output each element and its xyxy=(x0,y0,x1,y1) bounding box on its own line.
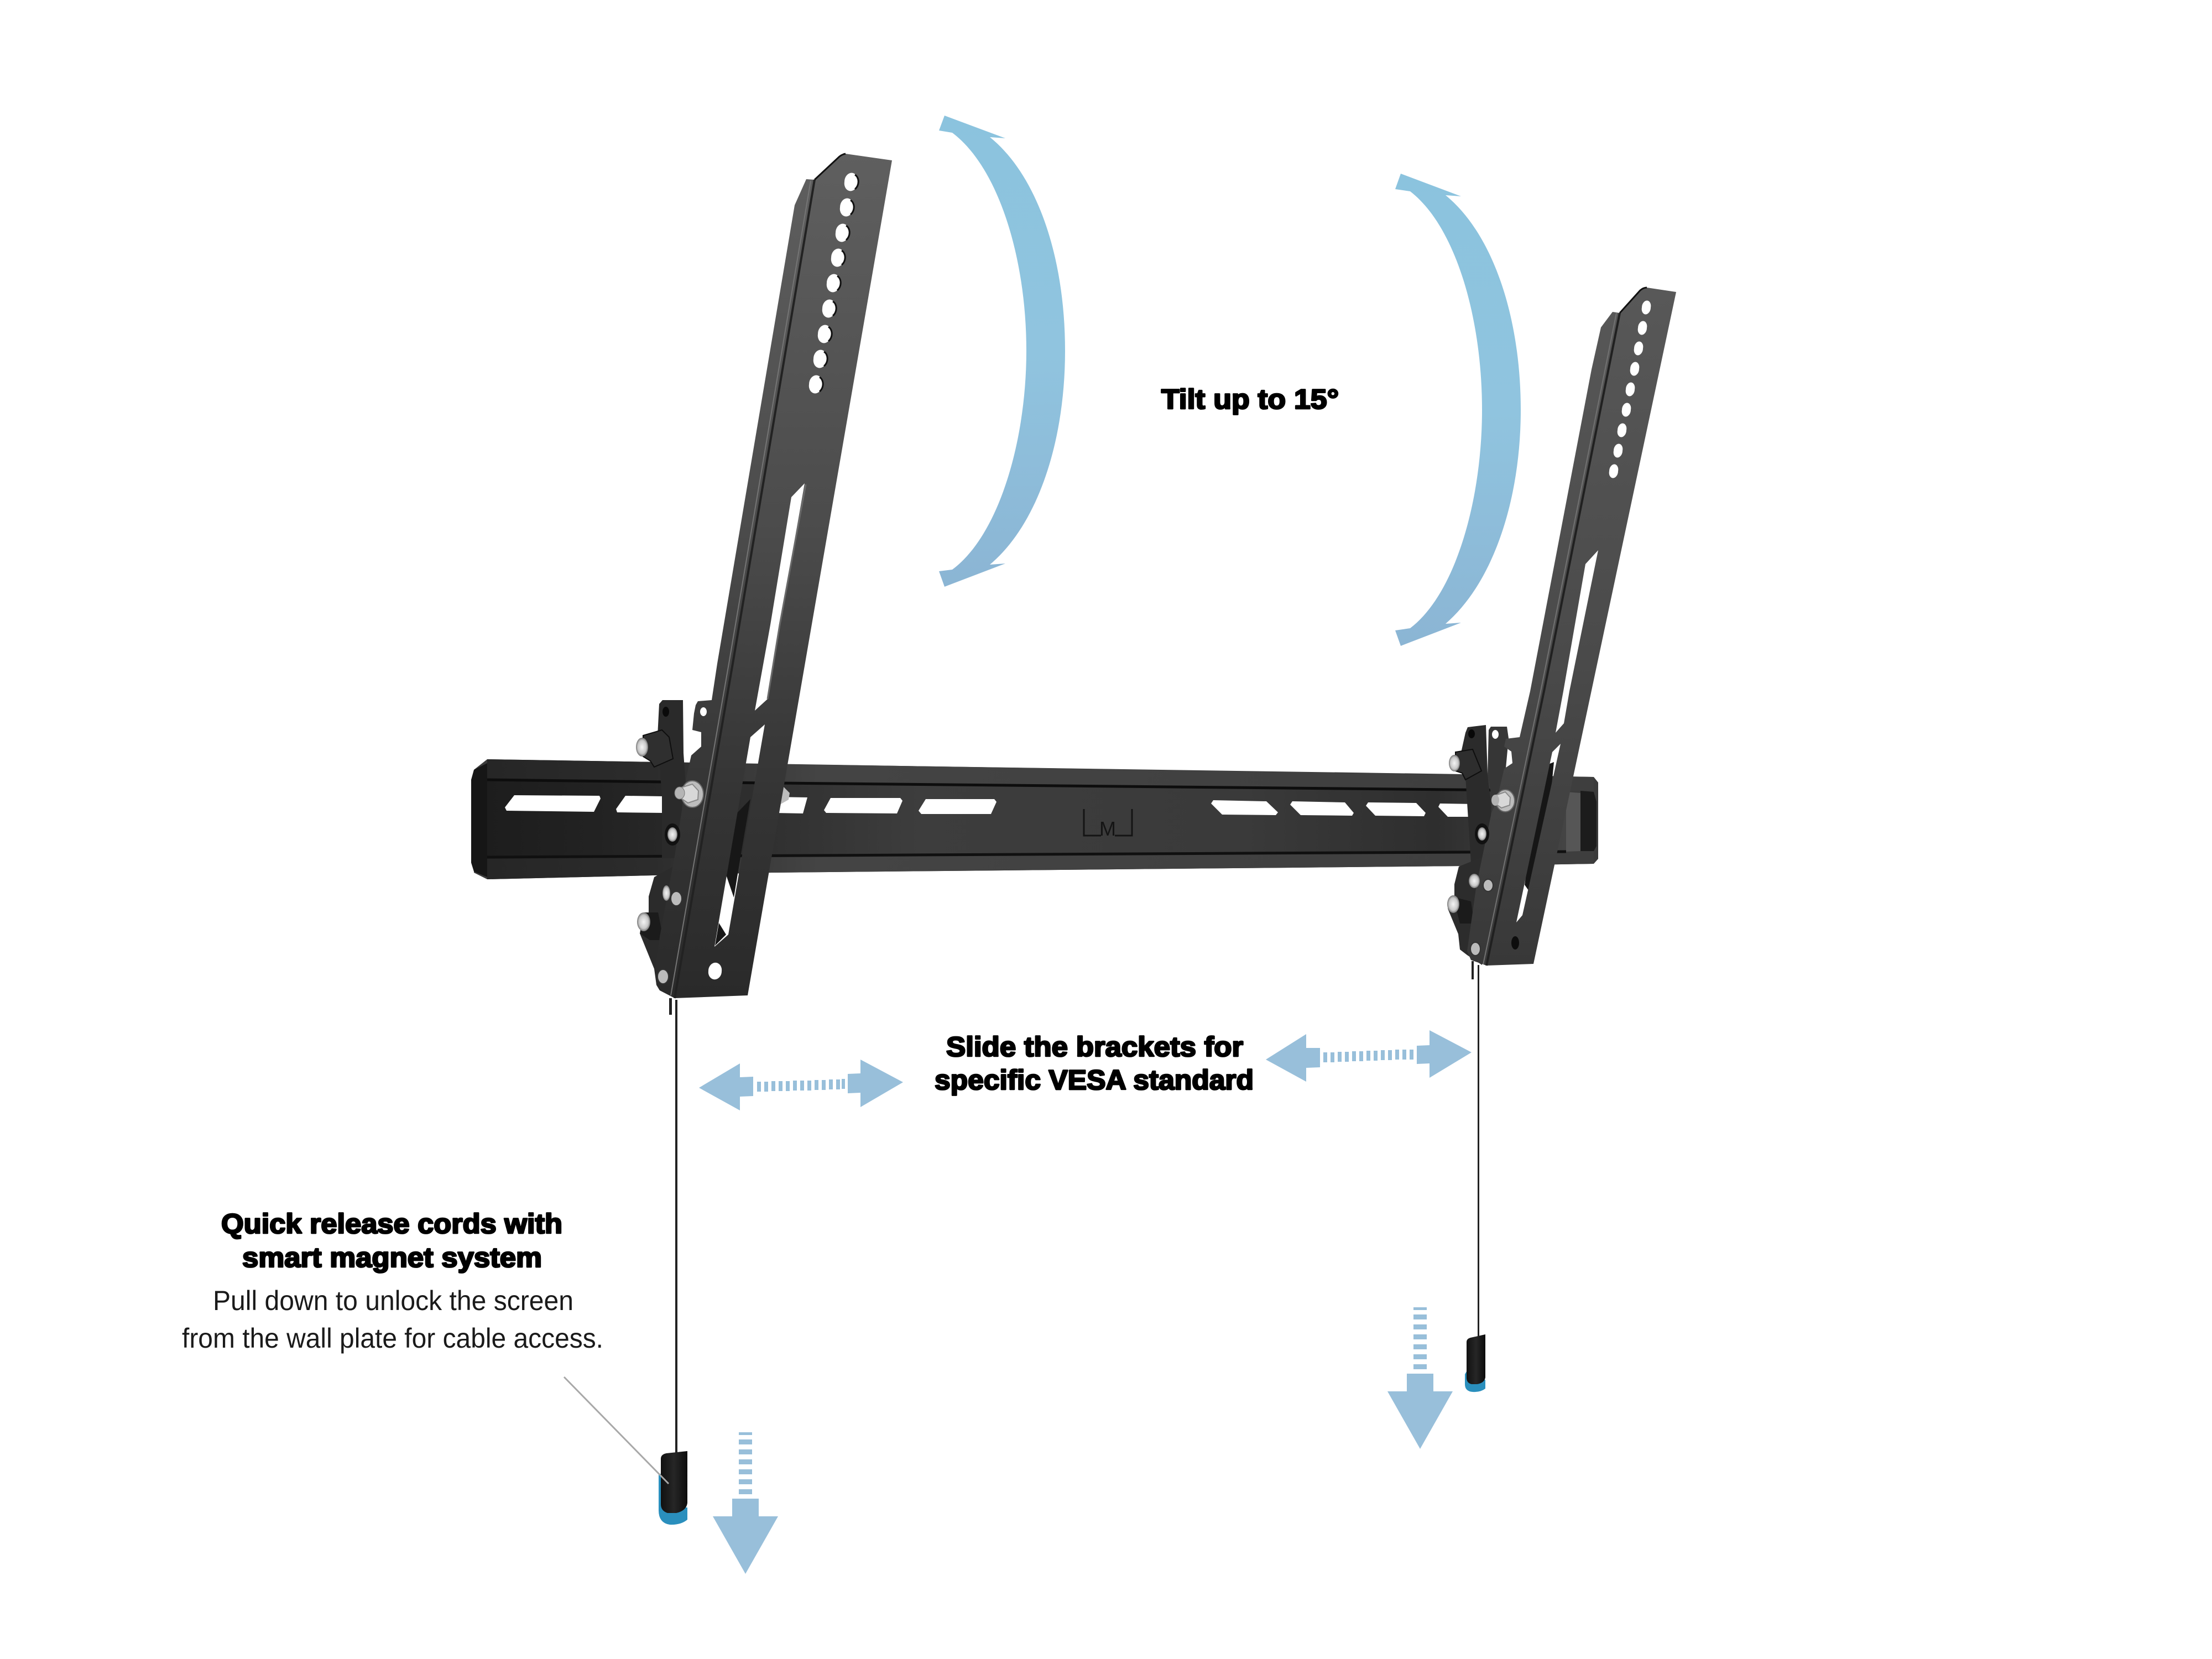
right slide arrow xyxy=(1266,1030,1472,1082)
left nut xyxy=(681,781,703,807)
left slot internals xyxy=(715,799,750,946)
right rear bracket xyxy=(1447,725,1509,965)
left lower screw xyxy=(671,891,682,906)
quick release heading: smart magnet system xyxy=(242,1242,542,1273)
right pivot bolt xyxy=(1475,823,1489,844)
left upper knob xyxy=(636,738,648,757)
right nut xyxy=(1496,790,1515,812)
right lower screw xyxy=(1483,879,1493,891)
right release handle xyxy=(1465,1334,1485,1392)
wall rail xyxy=(471,759,1598,879)
left bottom screw xyxy=(658,969,669,984)
right tilt arrow xyxy=(1395,174,1521,646)
right lower knob arm xyxy=(1453,897,1474,924)
right upper knob xyxy=(1449,755,1460,771)
rail slots xyxy=(505,795,1477,817)
left plate fold and hole edges xyxy=(671,154,858,998)
right tilt plate xyxy=(1467,288,1676,966)
right bottom hole xyxy=(1511,936,1519,950)
right tab holes xyxy=(1468,729,1499,739)
right upper knob arm xyxy=(1455,749,1481,780)
quick release heading: Quick release cords with xyxy=(221,1208,562,1239)
right dome screw xyxy=(1469,874,1480,888)
left lower knob xyxy=(637,912,650,931)
left tilt plate xyxy=(655,154,892,998)
right lower knob xyxy=(1447,895,1459,913)
left cord xyxy=(669,998,677,1453)
left rear bracket xyxy=(636,700,686,990)
right pivot bolt head xyxy=(1478,827,1486,841)
right cord xyxy=(1472,961,1479,1338)
quick release description: from the wall plate for cable access. xyxy=(182,1323,603,1354)
rail logo: M xyxy=(1099,817,1116,840)
left plate hardware xyxy=(658,781,703,984)
slide label xyxy=(935,1031,1254,1095)
rail right end xyxy=(1566,791,1597,852)
left pivot bolt head xyxy=(667,827,677,842)
right bolt tip xyxy=(1491,795,1499,806)
slide label: Slide the brackets for xyxy=(946,1031,1243,1062)
quick release description: Pull down to unlock the screen xyxy=(213,1285,573,1316)
left pull-down arrow xyxy=(713,1432,778,1574)
silver bolt behind left plate xyxy=(781,785,790,804)
right pull-down arrow xyxy=(1387,1307,1453,1449)
quick release description xyxy=(182,1285,603,1354)
right plate fold xyxy=(1483,288,1647,966)
left bolt tip xyxy=(675,787,685,799)
left dome screw xyxy=(662,885,670,901)
slide label: specific VESA standard xyxy=(935,1065,1254,1095)
rail logo xyxy=(1084,809,1132,840)
left tilt arrow xyxy=(939,116,1065,587)
left release handle xyxy=(659,1451,687,1525)
right plate hardware xyxy=(1469,790,1519,956)
left pivot bolt xyxy=(665,823,680,846)
quick release heading xyxy=(221,1208,562,1273)
tilt label: Tilt up to 15° xyxy=(1161,384,1339,415)
callout leader line xyxy=(564,1377,669,1484)
left lower knob arm xyxy=(640,912,664,940)
right slot internals xyxy=(1525,762,1554,890)
left tab hole xyxy=(662,707,669,717)
left upper knob arm xyxy=(643,730,673,767)
right bottom screw xyxy=(1470,942,1480,956)
left slide arrow xyxy=(699,1060,903,1110)
